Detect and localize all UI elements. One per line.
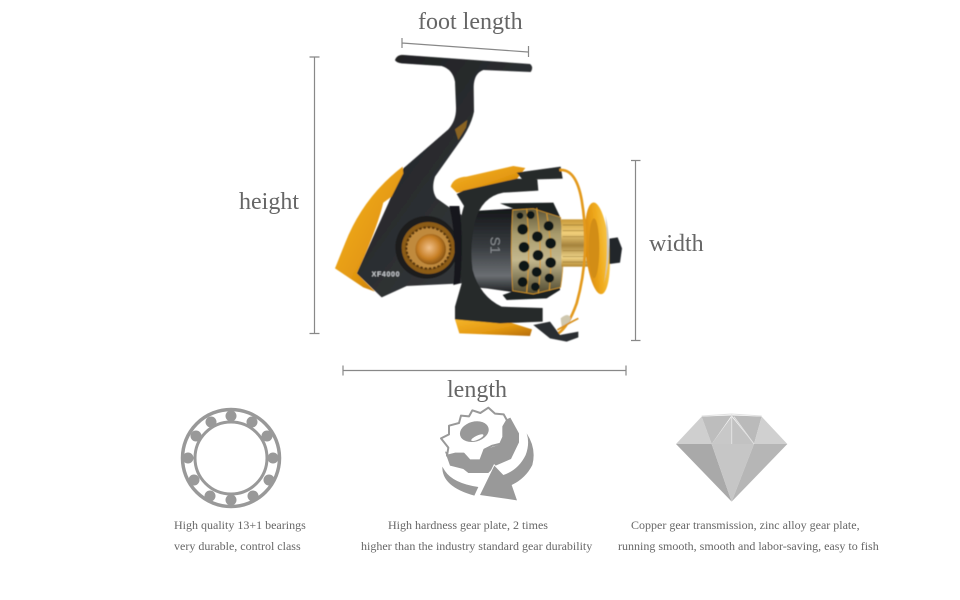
label: foot length: foot length <box>418 9 523 35</box>
gold lower rotor <box>455 319 532 336</box>
dimension line: length <box>343 366 626 376</box>
bottom bail arm <box>533 322 578 342</box>
caption: bearings: High quality 13+1 bearings <box>174 518 306 532</box>
dark rotor arm <box>455 179 543 323</box>
spool cylinder <box>467 208 517 293</box>
reel body and foot <box>357 55 532 297</box>
end nut <box>609 237 622 264</box>
line threads <box>561 219 593 267</box>
top bail arm <box>517 167 563 181</box>
caption: gear plate <box>361 518 592 553</box>
label: height: height <box>239 189 299 215</box>
icon: bearing <box>182 410 280 506</box>
label: width: width <box>649 231 704 257</box>
label: length: length <box>447 377 507 403</box>
fishing reel illustration <box>335 55 622 342</box>
model label: XF4000 <box>372 272 400 279</box>
icon: gear with arrows <box>441 408 534 500</box>
perforated spool skirt <box>500 203 563 300</box>
caption: gear plate: High hardness gear plate, 2 times <box>388 518 548 532</box>
caption: copper gear <box>618 518 879 553</box>
spool logo: S1 <box>488 237 504 254</box>
caption: bearings <box>174 518 306 553</box>
icon: diamond <box>676 414 787 502</box>
gold upper rotor <box>451 166 525 193</box>
caption: copper gear: Copper gear transmission, zinc alloy gear plate, <box>631 518 860 532</box>
caption: gear plate: higher than the industry standard gear durability <box>361 539 592 553</box>
dimension line: height <box>310 57 320 334</box>
caption: bearings: very durable, control class <box>174 539 301 553</box>
side knob <box>395 216 458 279</box>
bail wire <box>558 170 585 333</box>
dimension line: foot length <box>402 38 528 57</box>
dimension line: width <box>631 160 640 340</box>
caption: copper gear: running smooth, smooth and labor-saving, easy to fish <box>618 539 879 553</box>
gold stem accent <box>455 120 467 140</box>
spool front flange <box>581 201 613 295</box>
gold back plate <box>335 167 403 292</box>
